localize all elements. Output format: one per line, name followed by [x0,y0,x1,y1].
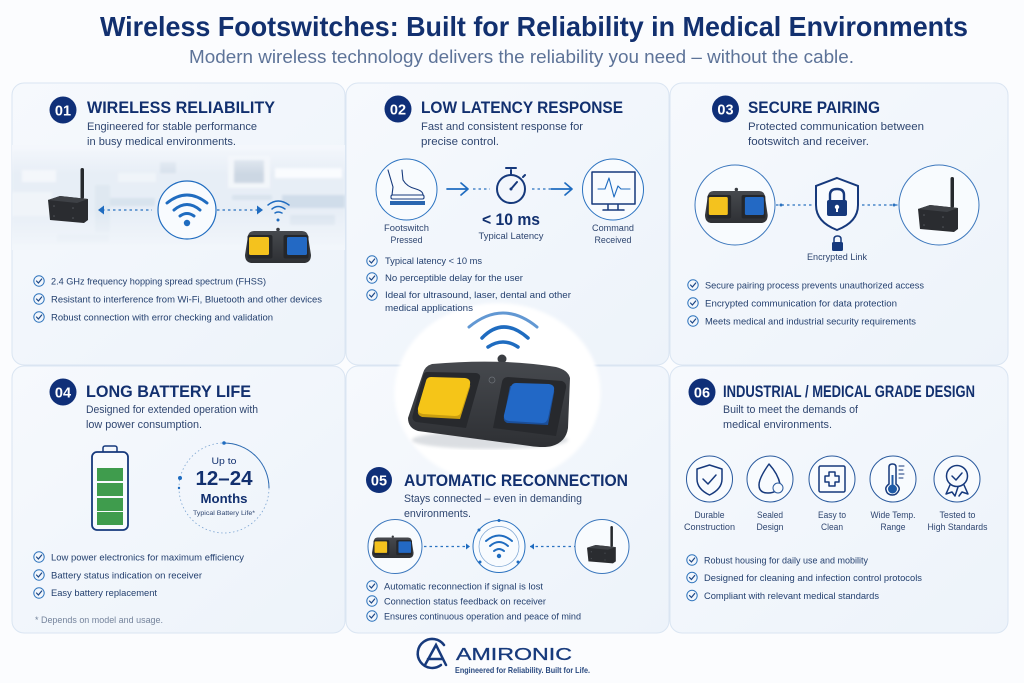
bullet list 02 [367,256,571,314]
bullet list 03: Meets medical and industrial security requirements [705,316,916,328]
latency value: < 10 ms [482,210,540,229]
panel 02 card [346,83,669,365]
title: Wireless Footswitches: Built for Reliability in Medical Environments [100,11,968,42]
icon labels: Clean [821,522,843,532]
battery life dial [178,441,269,533]
icon: wide temperature range [870,456,916,502]
icon: battery [92,446,128,530]
heading 02: LOW LATENCY RESPONSE [421,98,623,117]
icon labels: Wide Temp. [870,510,916,520]
description 05: environments. [404,508,471,520]
bullet list 06 [687,555,922,602]
icon: small wifi [268,201,289,222]
panel 05 card [346,366,669,633]
badge 02: 02 [390,102,406,118]
label: command received: Received [594,235,632,245]
footswitch in circle [695,165,775,245]
logo: Amironic [418,639,590,675]
label: encrypted link: Encrypted Link [807,252,867,262]
icon: reconnect wifi [473,519,525,572]
dotted link left [424,544,470,550]
footswitch in circle [368,520,422,574]
icon: monitor [582,159,644,220]
arrow 1 [447,183,490,195]
description 04: low power consumption. [86,419,202,431]
icon labels: Range [880,522,906,532]
dotted link left [776,204,812,206]
bullet list 03 [688,280,924,328]
description 01: Engineered for stable performance [87,121,257,133]
wordmark: AMIRONIC [456,644,572,664]
hero device body [408,354,570,449]
badge 01: 01 [55,104,71,120]
icon labels [684,510,988,532]
icon: foot pressing [376,159,437,220]
badge 01 [50,96,76,124]
badge 04 [50,378,76,406]
description 02 [421,121,583,148]
yellow pedal [418,380,470,419]
bullet list 06: Robust housing for daily use and mobility [704,556,868,566]
icon labels: Design [756,522,784,532]
icon: logo mark [418,639,446,668]
bullet list 05: Ensures continuous operation and peace of mind [384,612,581,622]
icon labels: Construction [684,522,735,532]
bullet list 03: Encrypted communication for data protection [705,298,897,310]
panel 04: long battery life [12,366,345,633]
heading 03: SECURE PAIRING [748,98,880,117]
heading 01: WIRELESS RELIABILITY [87,98,276,117]
label: footswitch pressed: Footswitch [384,223,429,233]
panel 03: secure pairing [670,83,1008,365]
arrow 2 [532,183,572,195]
badge 03 [712,96,739,122]
arrow to footswitch [217,206,263,214]
icon labels: Easy to [818,510,846,520]
bullet list 01: 2.4 GHz frequency hopping spread spectrum (FHSS) [51,276,266,288]
icon labels: Sealed [757,510,783,520]
battery life dial: 12–24 [196,468,253,490]
description 01: in busy medical environments. [87,136,236,148]
icon labels: Tested to [940,510,976,520]
bullet list 05: Automatic reconnection if signal is lost [384,582,543,592]
receiver device [48,168,88,223]
icon: easy to clean [809,456,855,502]
description 01 [87,121,257,148]
description 03: Protected communication between [748,121,924,133]
bullet list 03: Secure pairing process prevents unauthorized access [705,280,924,292]
dotted link right [530,544,575,550]
icon: small lock [832,236,843,251]
bullet list 02: Ideal for ultrasound, laser, dental and other [385,290,571,301]
icon: sealed design [747,456,793,502]
description 03 [748,121,924,148]
hospital background scene [12,145,345,250]
bullet list 06: Designed for cleaning and infection control protocols [704,573,922,584]
bullet list 04: Easy battery replacement [51,588,157,599]
bullet list 02: Typical latency < 10 ms [385,256,482,267]
hero footswitch [394,303,600,483]
badge 05: 05 [371,474,387,490]
battery life dial: Typical Battery Life* [193,510,256,517]
footnote: * Depends on model and usage. [35,615,163,625]
description 06: medical environments. [723,419,832,431]
badge 02 [384,96,412,122]
description 06: Built to meet the demands of [723,404,859,416]
latency value: Typical Latency [478,231,544,241]
label: footswitch pressed: Pressed [390,235,422,245]
label: command received [592,223,634,245]
subtitle: Modern wireless technology delivers the reliability you need – without the cable. [189,47,854,67]
badge 05 [366,467,392,493]
description 05: Stays connected – even in demanding [404,493,582,505]
battery life dial: Up to [212,456,236,467]
dotted link right [862,204,898,206]
description 03: footswitch and receiver. [748,136,869,148]
badge 06 [688,378,716,406]
battery life dial: Months [200,491,248,506]
bullet list 04: Low power electronics for maximum efficiency [51,552,244,564]
bullet list 01: Robust connection with error checking and validation [51,312,273,324]
bullet list 06: Compliant with relevant medical standards [704,591,879,602]
latency value [478,210,544,241]
bullet list 04: Battery status indication on receiver [51,570,202,582]
bullet list 04 [34,552,244,599]
blue pedal [504,386,554,425]
footswitch device [245,228,311,263]
badge 04: 04 [55,386,71,402]
description 02: precise control. [421,136,499,148]
panel 05: automatic reconnection [366,467,629,622]
heading 05: AUTOMATIC RECONNECTION [404,471,628,490]
arrow to receiver [98,206,152,214]
description 06 [723,404,859,431]
receiver in circle [899,165,979,245]
icon: hero wifi waves [469,313,537,347]
description 05 [404,493,582,520]
white spotlight circle [394,303,600,483]
panel 06: industrial / medical grade design [670,366,1008,633]
icon: stopwatch [497,168,525,203]
heading 04: LONG BATTERY LIFE [86,382,251,401]
badge 06: 06 [694,386,710,402]
icon: durable construction [686,456,732,502]
icon labels: Durable [694,510,724,520]
receiver in circle [575,520,629,574]
bullet list 05: Connection status feedback on receiver [384,596,546,608]
description 02: Fast and consistent response for [421,121,583,133]
icon: wifi circle [158,181,216,239]
bullet list 05 [367,581,581,622]
bullet list 01: Resistant to interference from Wi-Fi, Bluetooth and other devices [51,294,322,306]
icon: shield with lock [816,178,858,230]
bullet list 02: medical applications [385,303,473,314]
bullet list 01 [34,276,322,324]
tagline: Engineered for Reliability. Built for Life. [455,665,590,675]
description 04 [86,404,258,431]
label: command received: Command [592,223,634,233]
description 04: Designed for extended operation with [86,404,258,416]
badge 03: 03 [717,102,734,118]
label: footswitch pressed [384,223,429,245]
icon: tested to high standards [934,456,980,502]
panel 01: wireless reliability [12,83,345,365]
panel 02: low latency response [367,96,644,314]
bullet list 02: No perceptible delay for the user [385,273,523,284]
icon labels: High Standards [928,522,988,532]
